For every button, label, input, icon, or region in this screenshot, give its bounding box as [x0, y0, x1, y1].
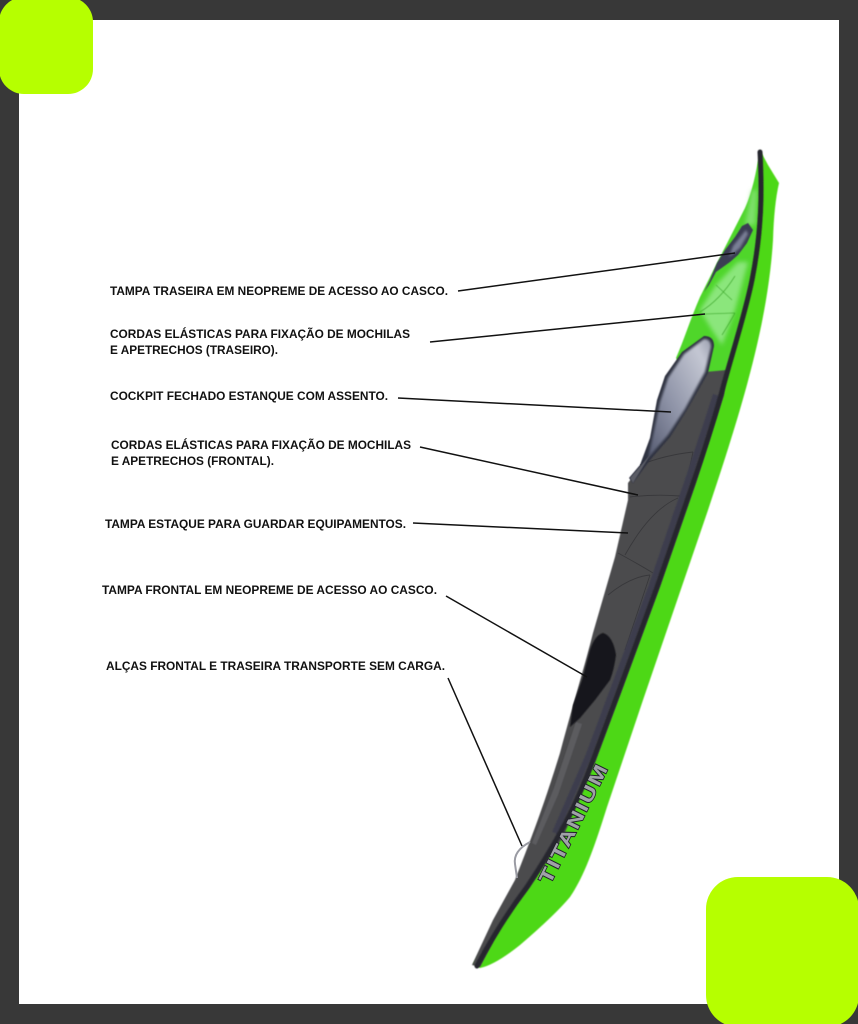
cockpit [629, 336, 714, 483]
kayak deck: grey section [472, 370, 727, 967]
rear hatch [704, 223, 753, 292]
leader line: rear hatch [458, 253, 735, 291]
corner accent: bottom right [706, 877, 858, 1024]
corner accent: top left [0, 0, 93, 94]
label: front hatch: TAMPA FRONTAL EM NEOPREME DE ACESSO AO CASCO. [102, 584, 437, 597]
brand name on hull: TITANIUM [535, 761, 612, 887]
leader line: front elastic cords [420, 447, 638, 495]
kayak hull [473, 150, 779, 968]
label: rear hatch: TAMPA TRASEIRA EM NEOPREME DE ACESSO AO CASCO. [110, 285, 448, 298]
kayak deck: rear green section [676, 160, 760, 400]
kayak illustration [472, 150, 779, 968]
label: storage hatch: TAMPA ESTAQUE PARA GUARDAR EQUIPAMENTOS. [105, 518, 406, 531]
lower deck highlight [532, 722, 582, 845]
cockpit outer shell [629, 336, 714, 483]
label: front elastic cords [111, 439, 411, 468]
front hatch [570, 633, 616, 727]
label: front elastic cords: CORDAS ELÁSTICAS PARA FIXAÇÃO DE MOCHILAS [111, 439, 411, 452]
label: cockpit: COCKPIT FECHADO ESTANQUE COM ASSENTO. [110, 390, 388, 403]
rear hatch highlight [729, 230, 748, 257]
leader line: carrying handles [448, 678, 522, 846]
leader line: front hatch [446, 596, 587, 677]
deck elastic cords [608, 452, 693, 650]
cockpit interior [648, 339, 711, 458]
label: front elastic cords: E APETRECHOS (FRONTAL). [111, 455, 274, 468]
label: rear elastic cords: E APETRECHOS (TRASEIRO). [110, 344, 278, 357]
side band [555, 395, 716, 833]
carrying handle [515, 842, 530, 878]
black gunwale line [477, 152, 761, 966]
label: carrying handles: ALÇAS FRONTAL E TRASEIRA TRANSPORTE SEM CARGA. [106, 660, 445, 673]
leader line: rear elastic cords [430, 314, 705, 342]
leader line: storage hatch [413, 523, 628, 533]
cockpit lower lip [630, 452, 652, 483]
leader line: cockpit [398, 398, 671, 412]
label: rear elastic cords: CORDAS ELÁSTICAS PARA FIXAÇÃO DE MOCHILAS [110, 328, 410, 341]
label: rear elastic cords [110, 328, 410, 357]
